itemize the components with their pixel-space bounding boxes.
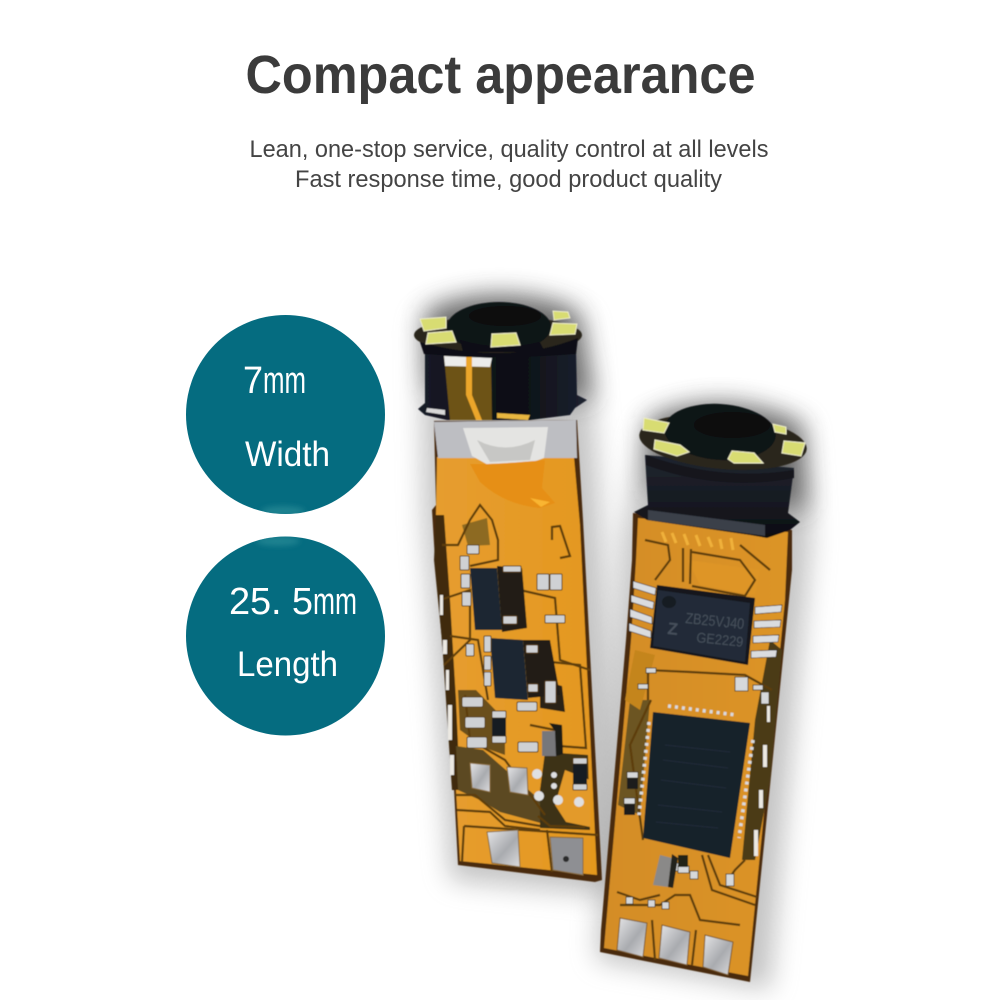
led ring — [637, 408, 809, 476]
subtitle text: Fast response time, good product quality — [295, 166, 722, 193]
flash memory chip: ZB25VJ40 — [685, 610, 745, 633]
badge: width: mm — [263, 360, 306, 402]
badge: width: 7 — [243, 360, 263, 402]
dark copper areas — [434, 515, 460, 790]
orange flex cable — [444, 356, 492, 420]
drop shadows behind modules — [420, 296, 812, 990]
silkscreen text marks — [440, 595, 454, 775]
title: Compact appearance — [246, 45, 756, 105]
left camera module — [414, 302, 602, 882]
right camera module — [600, 400, 809, 982]
traces — [617, 540, 772, 965]
badge: length — [186, 536, 385, 736]
lens — [662, 400, 778, 464]
right circuit board — [600, 513, 792, 982]
glossy adhesive — [470, 460, 555, 508]
left camera housing — [414, 302, 587, 420]
metal strip and cylinder — [434, 420, 577, 458]
connection coils — [662, 532, 733, 550]
left circuit board — [432, 420, 602, 882]
infographic canvas — [186, 55, 828, 1000]
badge: width — [186, 315, 385, 516]
flash memory chip: GE2229 — [696, 629, 744, 650]
flash memory chip: Z — [667, 619, 679, 639]
leds — [643, 418, 805, 463]
badge: length: Length — [237, 645, 338, 684]
leds — [420, 311, 577, 347]
traces — [440, 505, 598, 872]
small components — [460, 545, 587, 790]
flash memory chip — [650, 585, 755, 665]
subtitle text: Lean, one-stop service, quality control at all levels — [250, 136, 768, 163]
dark copper areas — [742, 640, 782, 860]
silkscreen marks — [754, 706, 770, 856]
led ring — [414, 316, 582, 354]
flash chip pins — [629, 581, 782, 658]
right camera housing — [634, 400, 809, 538]
lens — [447, 302, 551, 352]
badge: length: mm — [313, 581, 357, 623]
badge: width: Width — [245, 435, 330, 474]
ics — [497, 566, 527, 632]
silver pads — [617, 918, 647, 957]
components — [624, 668, 769, 909]
subtitle text — [250, 136, 768, 193]
main processor chip — [643, 712, 750, 858]
processor pins — [639, 706, 753, 838]
badge: length: 25. 5 — [229, 581, 313, 623]
silver pads — [470, 763, 490, 792]
